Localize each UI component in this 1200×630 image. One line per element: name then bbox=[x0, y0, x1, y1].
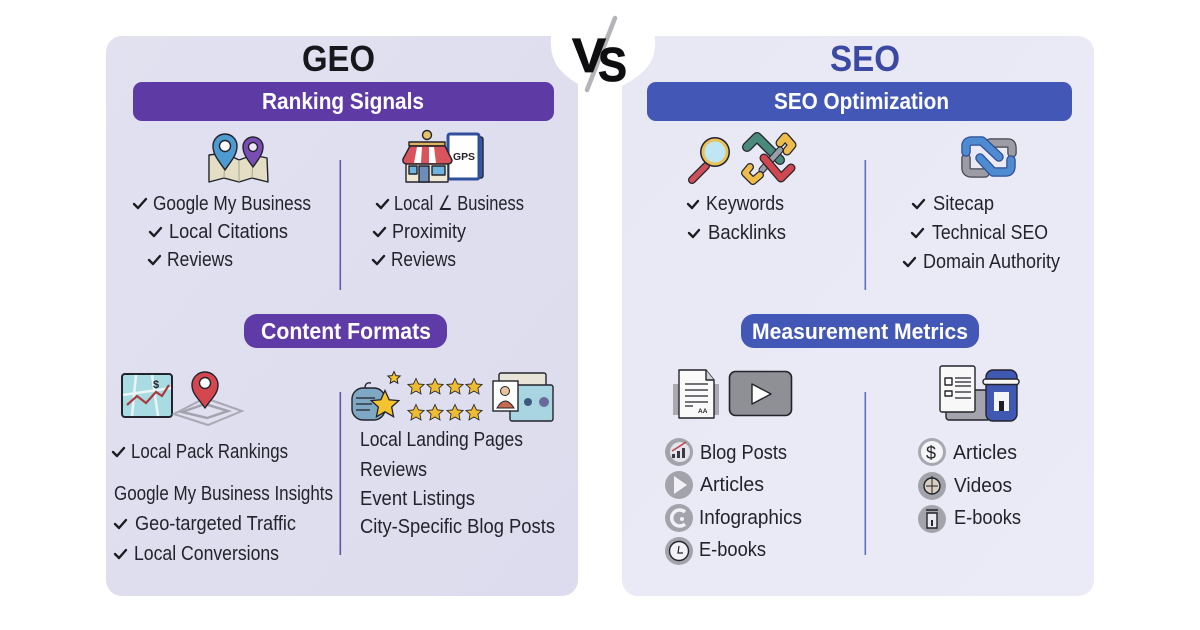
header bar: SEO Optimization bbox=[647, 82, 1072, 121]
list: ranking signals left: Local Citations bbox=[169, 221, 288, 243]
list: content types: E-books bbox=[699, 539, 766, 561]
list: ranking signals right: Proximity bbox=[392, 221, 466, 243]
icon: clock badge bbox=[665, 537, 693, 565]
VS badge bbox=[551, 0, 655, 120]
panel: SEO bbox=[622, 36, 1094, 596]
list: measurement left: Google My Business Insights bbox=[114, 483, 333, 505]
icon: document bbox=[673, 370, 719, 418]
header bar: SEO Optimization: SEO Optimization bbox=[774, 88, 949, 114]
icon: map with pins bbox=[209, 134, 268, 182]
icon: jar badge bbox=[918, 505, 946, 533]
header bar: Ranking Signals bbox=[133, 82, 554, 121]
icon: dollar badge: $ bbox=[926, 443, 936, 463]
icon: magnifier bbox=[692, 137, 730, 180]
list: technical SEO bbox=[904, 193, 1060, 273]
list: measurement left bbox=[113, 441, 333, 565]
icon: document: AA bbox=[698, 408, 708, 415]
list: measurement left: Geo-targeted Traffic bbox=[135, 513, 296, 535]
icon: storefront with GPS tablet: GPS bbox=[453, 151, 475, 163]
list: content formats: Local Landing Pages bbox=[360, 429, 523, 451]
list: ranking signals right bbox=[373, 193, 524, 271]
icon: chain link bbox=[966, 141, 1012, 173]
list: content types bbox=[665, 438, 802, 565]
list: keywords and backlinks: Keywords bbox=[706, 193, 784, 215]
list: technical SEO: Sitecap bbox=[933, 193, 994, 215]
pill: Measurement Metrics bbox=[741, 314, 979, 348]
list: content types: Blog Posts bbox=[700, 442, 787, 464]
list: ranking signals left: Reviews bbox=[167, 249, 233, 271]
list: ranking signals right: Local ∠ Business bbox=[394, 193, 524, 215]
icon: checklist and blue jar bbox=[940, 366, 1019, 421]
icon: play badge bbox=[665, 471, 693, 499]
list: ranking signals left bbox=[134, 193, 311, 271]
list: metric types bbox=[918, 438, 1021, 533]
icon: storefront with GPS tablet bbox=[403, 130, 483, 182]
list: measurement left: Local Conversions bbox=[134, 543, 279, 565]
title: SEO: SEO bbox=[830, 38, 900, 79]
list: ranking signals left: Google My Business bbox=[153, 193, 311, 215]
pill: Measurement Metrics: Measurement Metrics bbox=[752, 319, 968, 344]
list: content formats: Event Listings bbox=[360, 488, 475, 510]
list: keywords and backlinks bbox=[688, 193, 786, 244]
icon: chart badge bbox=[665, 438, 693, 466]
list: technical SEO: Technical SEO bbox=[932, 222, 1048, 244]
VS badge: V bbox=[572, 30, 606, 83]
list: metric types: Videos bbox=[954, 475, 1012, 497]
header bar: Ranking Signals: Ranking Signals bbox=[262, 88, 424, 114]
icon: ranking chart and location pin: $ bbox=[153, 379, 159, 391]
list: metric types: E-books bbox=[954, 507, 1021, 529]
list: ranking signals right: Reviews bbox=[391, 249, 456, 271]
panel: GEO bbox=[106, 36, 578, 596]
list: content types: Articles bbox=[700, 474, 764, 496]
icon: reviews with stars and web pages bbox=[352, 372, 553, 421]
list: keywords and backlinks: Backlinks bbox=[708, 222, 786, 244]
icon: backlinks chain bbox=[745, 137, 792, 181]
list: content types: Infographics bbox=[699, 507, 802, 529]
title: GEO: GEO bbox=[302, 38, 375, 79]
icon: refresh badge bbox=[665, 504, 693, 532]
list: content formats: City-Specific Blog Posts bbox=[360, 516, 555, 538]
list: content formats bbox=[360, 429, 555, 538]
list: metric types: Articles bbox=[953, 442, 1017, 464]
list: technical SEO: Domain Authority bbox=[923, 251, 1060, 273]
icon: globe badge bbox=[918, 472, 946, 500]
icon: video player bbox=[730, 372, 792, 416]
pill: Content Formats bbox=[244, 314, 447, 348]
VS badge: S bbox=[598, 39, 627, 92]
list: content formats: Reviews bbox=[360, 459, 427, 481]
icon: ranking chart and location pin bbox=[122, 372, 242, 425]
pill: Content Formats: Content Formats bbox=[261, 318, 431, 344]
list: measurement left: Local Pack Rankings bbox=[131, 441, 288, 463]
